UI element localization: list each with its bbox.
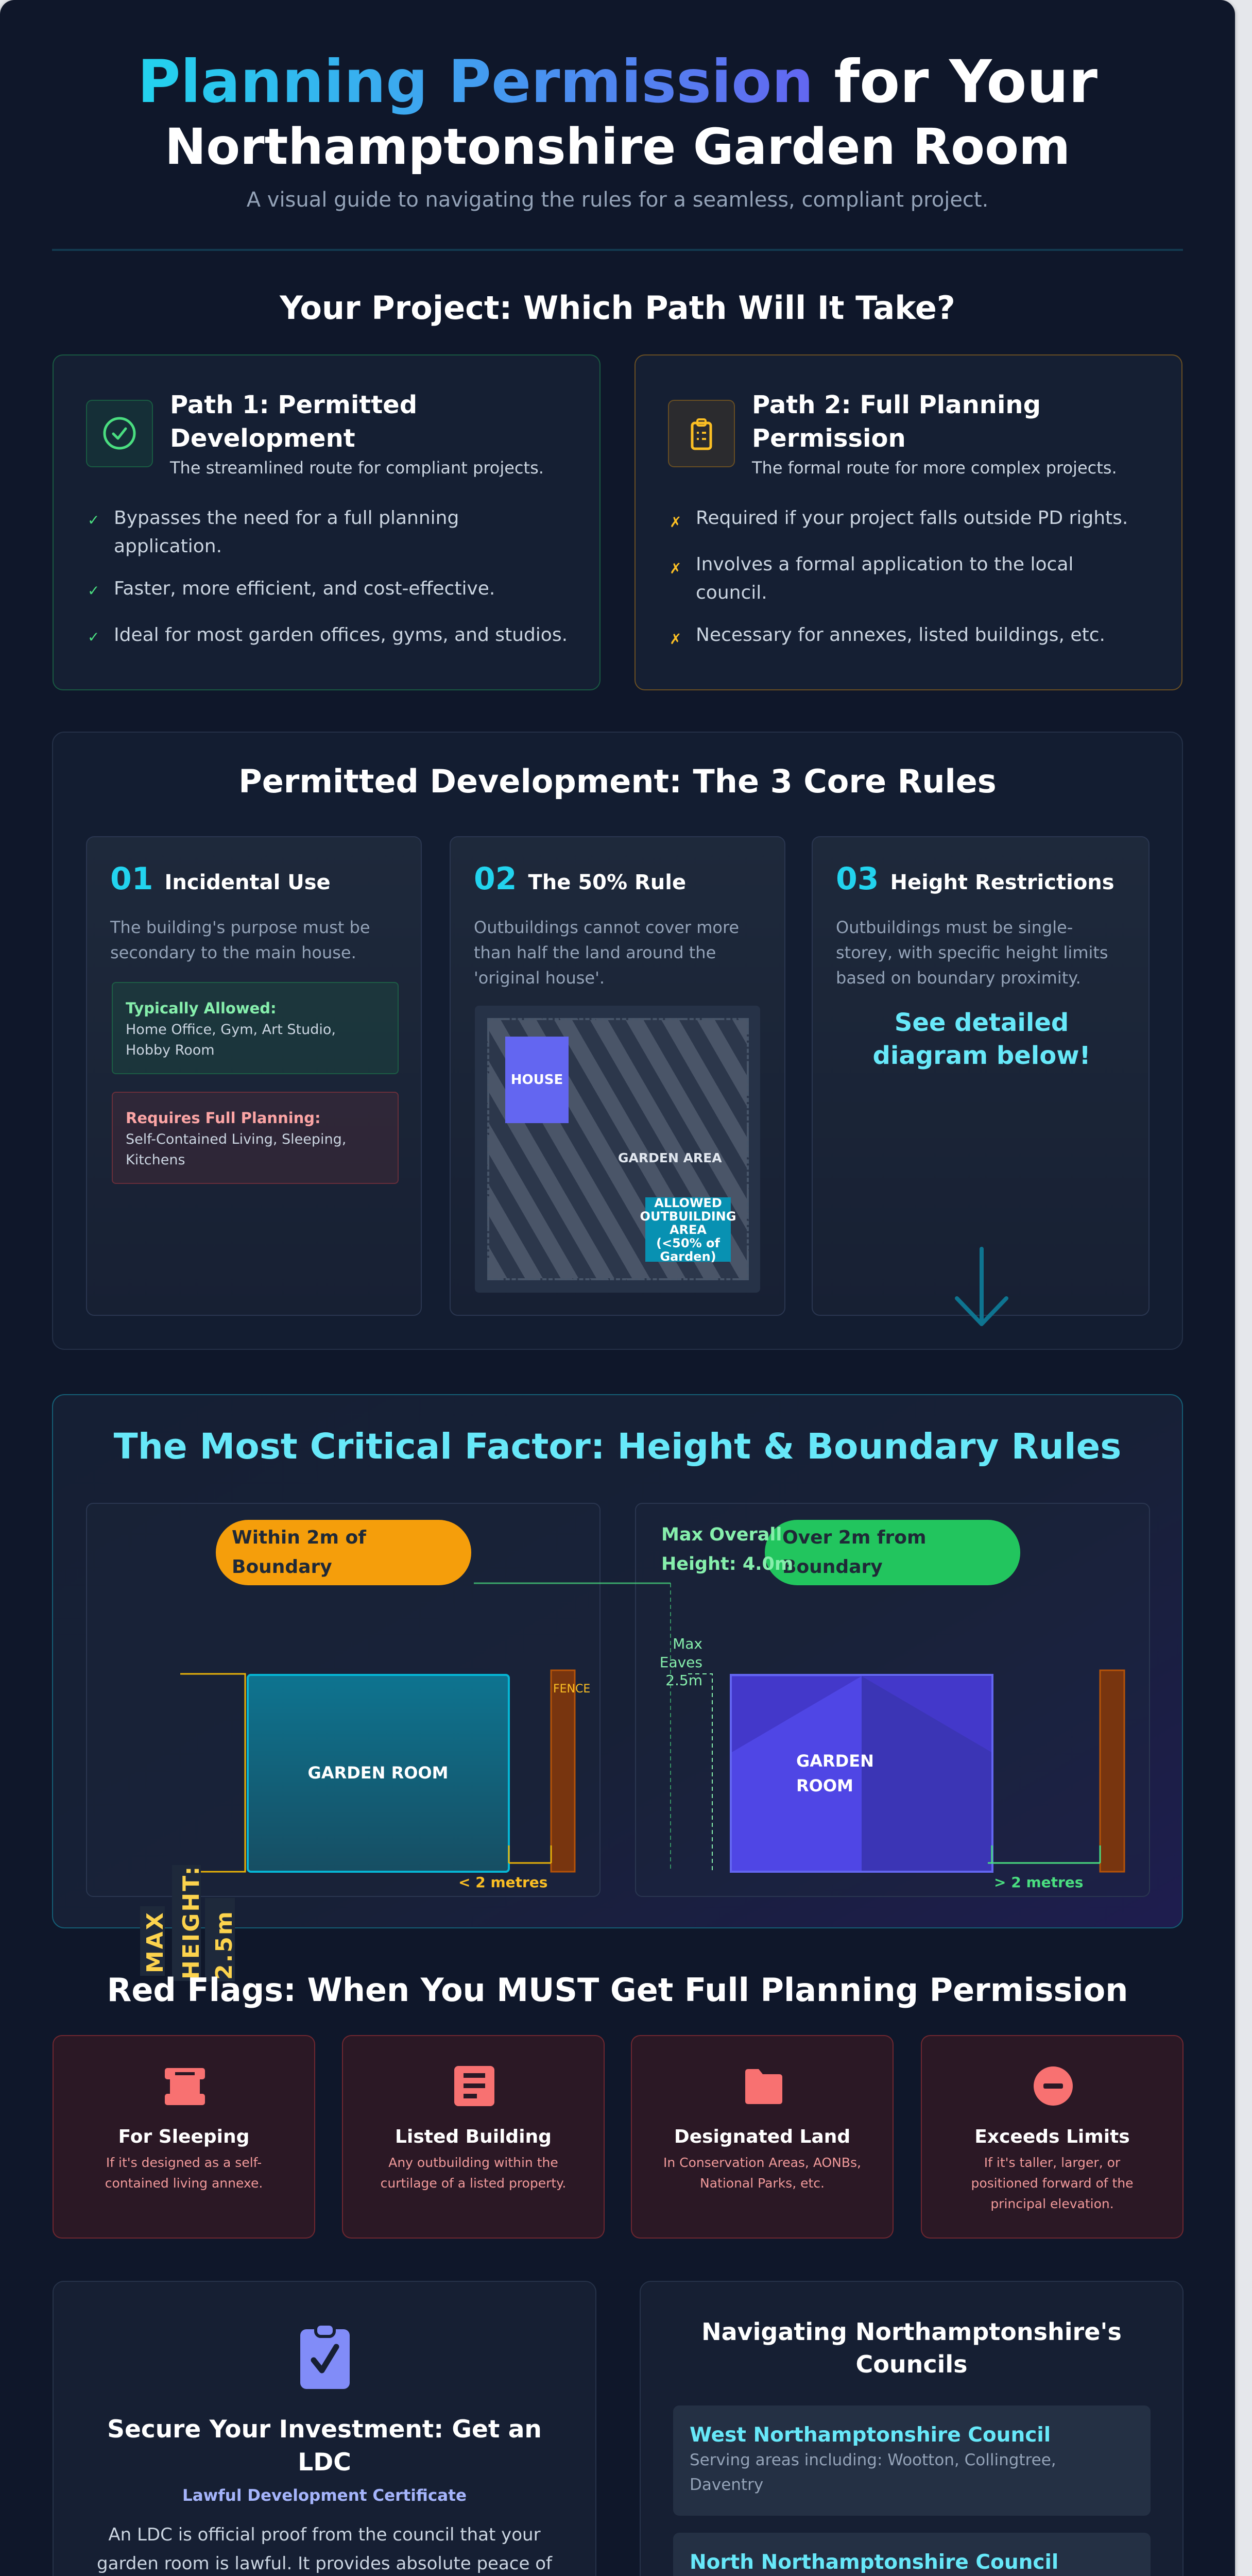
council: north	[673, 2533, 1151, 2576]
distance marker right: > 2 metres	[994, 1874, 1083, 1891]
sub-panel: within 2m	[86, 1503, 601, 1897]
callout: typically allowed	[112, 982, 399, 1074]
card: listed building	[342, 2035, 605, 2239]
garden room right: GARDEN	[796, 1751, 874, 1771]
garden room right	[731, 1675, 992, 1872]
card: listed building: Listed Building	[395, 2126, 552, 2147]
house block	[505, 1037, 569, 1123]
path 2 title: Path 2: Full Planning	[752, 391, 1041, 419]
panel: councils	[640, 2281, 1184, 2576]
panel: path 1 permitted development: Ideal for most garden offices, gyms, and studios.	[114, 624, 568, 646]
card: listed building: Any outbuilding within the curtilage of a listed property.	[381, 2155, 566, 2191]
connector line	[474, 1583, 671, 1872]
panel: path 1 permitted development: ✓	[88, 629, 99, 646]
label: max height 2.5m vertical: HEIGHT:	[178, 1865, 204, 1979]
fence left: FENCE	[553, 1683, 590, 1696]
label: max eaves	[660, 1635, 712, 1872]
councils heading	[701, 2318, 1122, 2378]
chart: boundary height diagram	[140, 1520, 1125, 1981]
distance marker left: < 2 metres	[458, 1874, 547, 1891]
panel: path 1 permitted development	[53, 354, 601, 690]
path 2 subtitle: The formal route for more complex projects.	[752, 458, 1117, 478]
pill: within 2m	[216, 1520, 471, 1585]
rule 03 text: Outbuildings must be single-storey, with specific height limits based on boundary proximity.	[836, 918, 1108, 988]
panel: path 1 permitted development: Faster, more efficient, and cost-effective.	[114, 578, 495, 599]
title	[138, 47, 1097, 176]
rule 01 text: The building's purpose must be secondary to the main house.	[110, 918, 370, 962]
allowed outbuilding block: OUTBUILDING	[640, 1209, 736, 1223]
council: north: North Northamptonshire Council	[690, 2551, 1058, 2574]
panel: path 2 full planning: Required if your project falls outside PD rights.	[696, 507, 1128, 529]
panel: path 2 full planning: ✗	[670, 514, 681, 531]
path 1 title: Development	[170, 424, 355, 453]
label: max overall height: Max Overall	[661, 1524, 782, 1545]
rule card 01	[86, 836, 422, 1316]
panel: LDC	[53, 2281, 596, 2576]
card: for sleeping	[53, 2035, 315, 2239]
path 1 subtitle: The streamlined route for compliant projects.	[170, 458, 544, 478]
card: designated land: In Conservation Areas, AONBs, National Parks, etc.	[663, 2155, 861, 2191]
rule 01 heading: 01 Incidental Use	[110, 861, 331, 897]
garden room left: GARDEN ROOM	[308, 1763, 448, 1783]
panel: path 2 full planning: ✗	[670, 560, 681, 577]
pill: over 2m: Over 2m from	[782, 1527, 927, 1548]
label: max eaves: Max	[673, 1635, 702, 1652]
icon: clipboard	[668, 400, 735, 467]
allowed outbuilding block: Garden)	[660, 1249, 716, 1263]
allowed outbuilding block	[645, 1197, 731, 1262]
pill: over 2m: Boundary	[782, 1556, 883, 1578]
panel: path 1 permitted development: Bypasses the need for a full planning application.	[114, 507, 459, 557]
allowed outbuilding block: ALLOWED	[654, 1195, 722, 1210]
distance marker left	[458, 1845, 551, 1891]
callout: typically allowed: Typically Allowed:	[126, 999, 277, 1017]
panel: path 2 full planning: ✗	[670, 631, 681, 648]
icon: bed	[165, 2068, 205, 2105]
label: max height 2.5m vertical: 2.5m	[211, 1910, 237, 1980]
label: max eaves: Eaves	[660, 1654, 702, 1671]
label: max overall height: Height: 4.0m	[661, 1554, 793, 1574]
callout: requires full planning: Kitchens	[126, 1152, 185, 1168]
pill: over 2m	[765, 1520, 1020, 1585]
rule 02 text: Outbuildings cannot cover more than half the land around the 'original house'.	[474, 918, 739, 988]
heading: red flags: Red Flags: When You MUST Get Full Planning Permission	[107, 1971, 1128, 2009]
callout: typically allowed: Hobby Room	[126, 1042, 215, 1058]
path 2 title	[752, 391, 1041, 453]
allowed outbuilding block: (<50% of	[656, 1235, 720, 1250]
rule 02 heading: 02 The 50% Rule	[474, 861, 686, 897]
pill: within 2m: Within 2m of	[232, 1527, 366, 1548]
card: for sleeping: If it's designed as a self-contained living annexe.	[105, 2155, 263, 2191]
panel: path 2 full planning: Necessary for annexes, listed buildings, etc.	[696, 624, 1105, 646]
card: for sleeping: For Sleeping	[118, 2126, 249, 2147]
house block: HOUSE	[511, 1072, 563, 1088]
title: Northamptonshire Garden Room	[165, 118, 1070, 176]
callout: see diagram below: See detailed	[895, 1008, 1069, 1037]
council: west	[673, 2405, 1151, 2516]
card: exceeds limits: Exceeds Limits	[974, 2126, 1130, 2147]
height bracket left	[180, 1674, 245, 1872]
chart: 50% garden diagram	[475, 1006, 760, 1293]
garden room left	[248, 1675, 509, 1872]
icon: clipboard check	[300, 2326, 350, 2389]
callout: see diagram below	[873, 1008, 1090, 1070]
icon: building	[454, 2066, 494, 2106]
pill: within 2m: Boundary	[232, 1556, 332, 1578]
sub-panel: over 2m	[635, 1503, 1150, 1897]
garden room right: ROOM	[796, 1776, 853, 1795]
callout: see diagram below: diagram below!	[873, 1041, 1090, 1070]
rule card 02	[450, 836, 785, 1316]
path 2 title: Permission	[752, 424, 906, 453]
callout: requires full planning: Self-Contained Living, Sleeping,	[126, 1131, 346, 1147]
council: west: West Northamptonshire Council	[690, 2424, 1051, 2447]
LDC subheading: Lawful Development Certificate	[182, 2486, 467, 2505]
council: west: Serving areas including: Wootton, Collingtree, Daventry	[690, 2451, 1056, 2494]
card: exceeds limits: If it's taller, larger, or positioned forward of the principal elevation.	[971, 2155, 1134, 2211]
icon: check circle	[86, 400, 153, 467]
subtitle: A visual guide to navigating the rules for a seamless, compliant project.	[247, 188, 988, 212]
card: designated land: Designated Land	[674, 2126, 850, 2147]
garden area label: GARDEN AREA	[618, 1150, 722, 1165]
panel: 3 core rules	[52, 732, 1183, 1350]
panel: height & boundary rules	[52, 1394, 1183, 1928]
heading: which path: Your Project: Which Path Will It Take?	[280, 289, 955, 327]
fence left	[551, 1670, 590, 1872]
path 1 title: Path 1: Permitted	[170, 391, 417, 419]
LDC heading: Secure Your Investment: Get an LDC	[107, 2415, 542, 2477]
allowed outbuilding block: AREA	[670, 1222, 707, 1236]
panel: path 2 full planning	[634, 354, 1182, 690]
card: designated land	[631, 2035, 894, 2239]
councils heading: Councils	[855, 2350, 968, 2378]
rule 03 heading: 03 Height Restrictions	[836, 861, 1114, 897]
councils heading: Navigating Northamptonshire's	[701, 2318, 1122, 2346]
callout: requires full planning: Requires Full Planning:	[126, 1109, 321, 1127]
list: requirements	[670, 507, 1128, 648]
label: max height 2.5m vertical	[140, 1865, 237, 1981]
card: exceeds limits	[921, 2035, 1184, 2239]
icon: folder	[745, 2069, 782, 2104]
heading: core rules: Permitted Development: The 3 Core Rules	[238, 762, 997, 800]
panel: path 1 permitted development: ✓	[88, 512, 99, 529]
path 1 title	[170, 391, 417, 453]
heading: critical factor: The Most Critical Factor: Height & Boundary Rules	[114, 1426, 1121, 1467]
panel: path 2 full planning: Involves a formal application to the local council.	[696, 554, 1073, 603]
label: max eaves: 2.5m	[665, 1672, 702, 1689]
title: Planning Permission for Your	[138, 47, 1097, 116]
arrow: down	[955, 1247, 1008, 1326]
callout: requires full planning	[112, 1092, 399, 1184]
distance marker right	[988, 1845, 1100, 1891]
rule card 03	[812, 836, 1150, 1316]
label: max overall height	[661, 1524, 793, 1574]
icon: minus circle	[1034, 2066, 1073, 2106]
callout: typically allowed: Home Office, Gym, Art Studio,	[126, 1022, 336, 1038]
list: benefits	[88, 507, 568, 646]
panel: path 1 permitted development: ✓	[88, 582, 99, 599]
fence right	[1100, 1670, 1124, 1872]
label: max height 2.5m vertical: MAX	[142, 1911, 168, 1973]
